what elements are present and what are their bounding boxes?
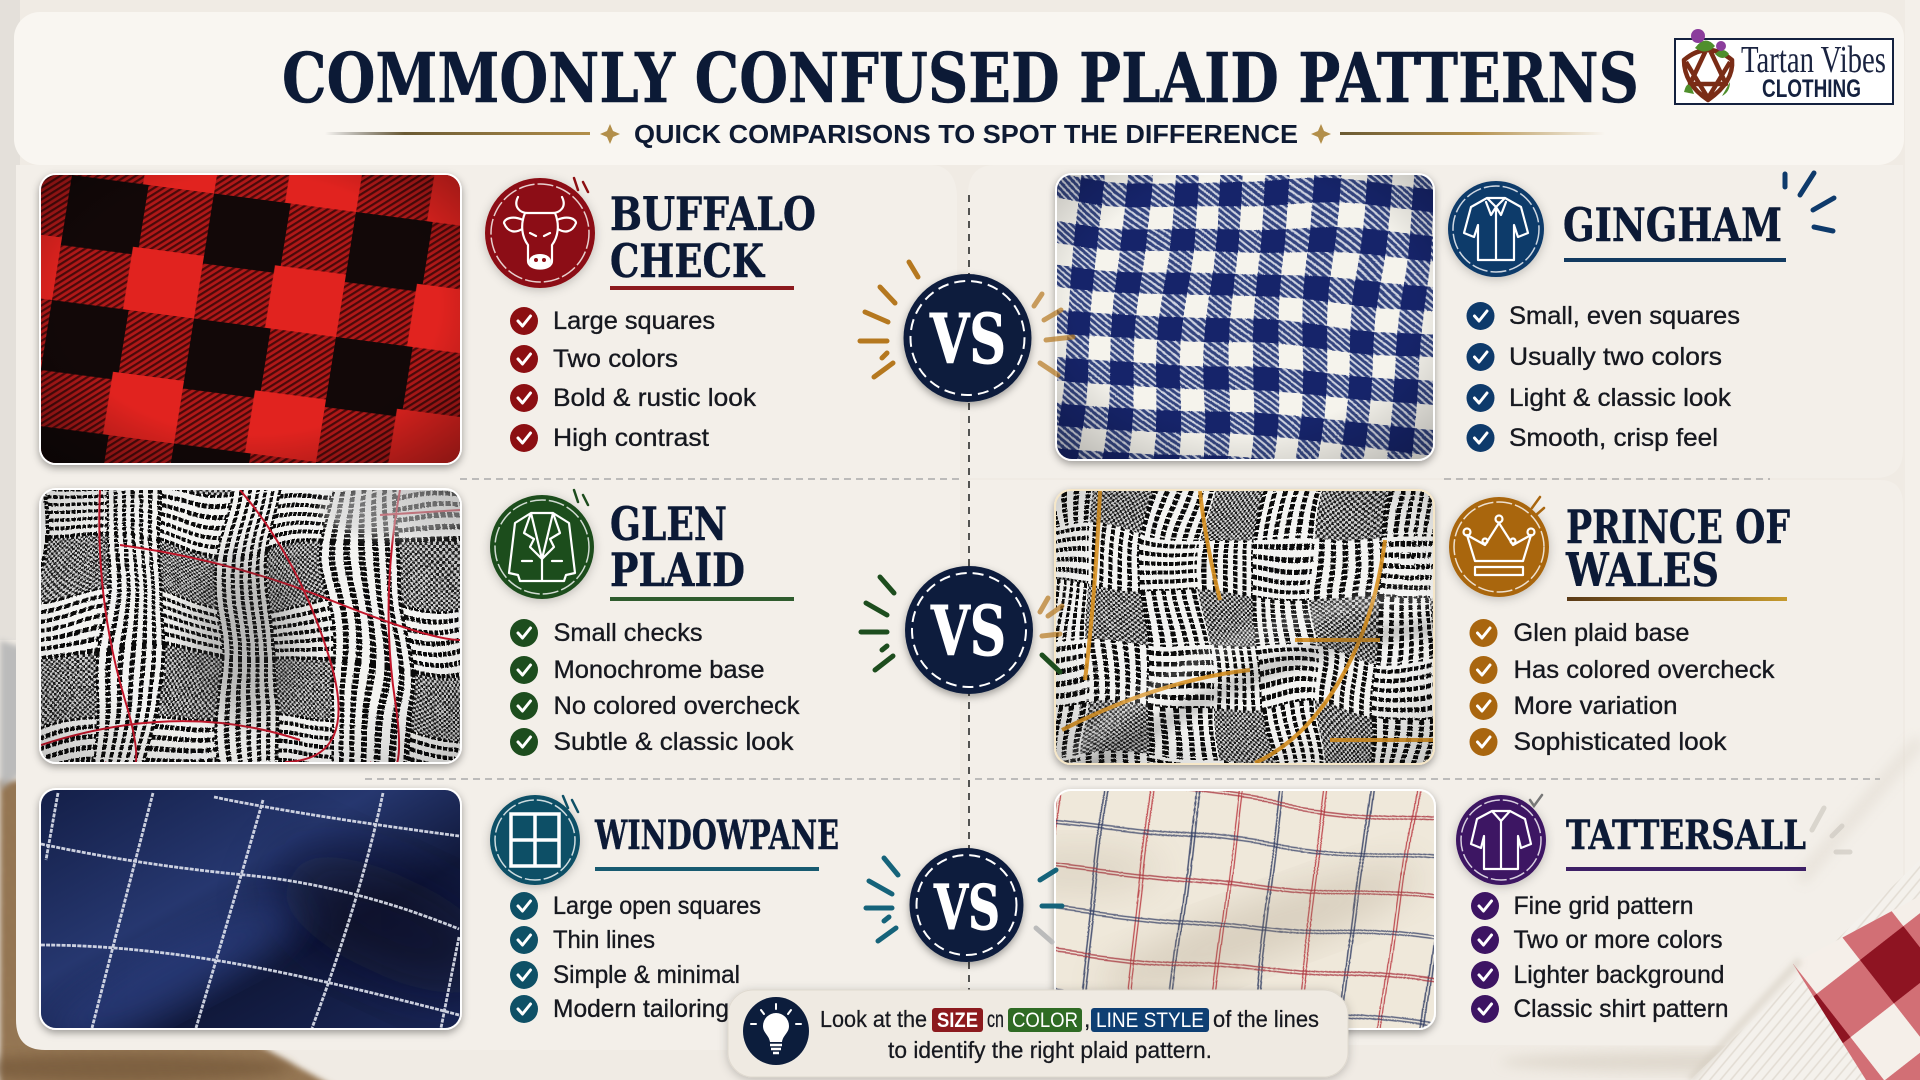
icon: lightbulb	[743, 997, 809, 1065]
tip text: COLOR	[1012, 1009, 1078, 1032]
tip text: Look at the	[820, 1006, 927, 1032]
list: gingham traits: Smooth, crisp feel	[1509, 424, 1718, 452]
row: glen plaid	[34, 486, 800, 772]
fabric swatch: windowpane	[34, 786, 467, 1038]
fabric swatch: buffalo check	[39, 173, 462, 465]
VS badge: glen plaid vs prince of wales	[861, 566, 1062, 694]
sparkle marks	[1530, 795, 1542, 806]
sparkle marks	[563, 796, 578, 812]
list: prince of wales traits	[1470, 619, 1775, 756]
list: gingham traits: Small, even squares	[1509, 302, 1740, 330]
list: buffalo check traits: Large squares	[553, 307, 715, 335]
sparkle marks	[1532, 497, 1544, 515]
title: COMMONLY CONFUSED PLAID PATTERNS	[282, 39, 1639, 119]
dashed dividers	[365, 195, 1880, 990]
list: windowpane traits: Simple & minimal	[553, 961, 740, 989]
panel: title header	[14, 12, 1904, 165]
row: buffalo check	[39, 173, 816, 465]
heading: glen plaid: GLEN	[610, 497, 727, 551]
list: tattersall traits: Fine grid pattern	[1514, 892, 1694, 920]
sparkle marks	[1785, 173, 1834, 231]
list: glen plaid traits: Monochrome base	[554, 656, 764, 684]
list: buffalo check traits: Two colors	[553, 345, 678, 373]
tip text: to identify the right plaid pattern.	[888, 1037, 1212, 1063]
heading: prince of wales: PRINCE OF	[1566, 500, 1790, 554]
icon: window on teal badge	[490, 795, 580, 885]
list: glen plaid traits: No colored overcheck	[554, 692, 800, 720]
list: windowpane traits: Thin lines	[553, 926, 655, 954]
subtitle with ornamented rules	[325, 119, 1605, 149]
list: gingham traits	[1466, 302, 1740, 452]
subtitle with ornamented rules: QUICK COMPARISONS TO SPOT THE DIFFERENCE	[634, 119, 1298, 149]
panel: right comparison rows two and three	[968, 480, 1903, 1045]
heading: tattersall	[1566, 812, 1806, 871]
list: tattersall traits: Classic shirt pattern	[1514, 995, 1728, 1023]
heading: windowpane	[594, 812, 839, 871]
list: tattersall traits: Two or more colors	[1514, 926, 1722, 954]
logo: Tartan Vibes Clothing: CLOTHING	[1762, 75, 1861, 103]
heading: windowpane: WINDOWPANE	[594, 812, 839, 859]
row: gingham	[1010, 130, 1834, 505]
sparkle marks	[574, 178, 588, 192]
tip text	[820, 1006, 1319, 1063]
fabric swatch: tattersall	[1049, 787, 1441, 1038]
list: prince of wales traits: Sophisticated look	[1514, 728, 1727, 756]
tip text: ,	[1084, 1006, 1090, 1032]
icon: shirt on purple badge	[1456, 795, 1546, 885]
VS badge: glen plaid vs prince of wales: VS	[930, 592, 1006, 672]
list: tattersall traits	[1471, 892, 1728, 1023]
decorative cloth: white knit with red check in the lower right corner	[1690, 740, 1920, 1080]
row: tattersall	[1000, 745, 1850, 1075]
fabric swatch: gingham	[1050, 171, 1440, 469]
list: tattersall traits: Lighter background	[1514, 961, 1724, 989]
fabric swatch: prince of wales	[1049, 487, 1440, 773]
heading: buffalo check: BUFFALO	[610, 187, 816, 241]
faint sparkle marks	[1812, 808, 1850, 852]
heading: buffalo check: CHECK	[610, 234, 766, 288]
VS badge: buffalo check vs gingham	[860, 262, 1073, 402]
VS badge: buffalo check vs gingham: VS	[929, 300, 1006, 380]
list: windowpane traits: Large open squares	[553, 892, 761, 920]
panel: right comparison row one	[968, 165, 1903, 478]
list: windowpane traits	[510, 892, 761, 1023]
heading: prince of wales: WALES	[1565, 543, 1719, 597]
list: windowpane traits: Modern tailoring	[553, 995, 729, 1023]
list: gingham traits: Light & classic look	[1509, 384, 1732, 412]
list: prince of wales traits: Glen plaid base	[1514, 619, 1690, 647]
heading: glen plaid	[610, 497, 794, 601]
heading: gingham: GINGHAM	[1563, 198, 1782, 252]
row: windowpane	[32, 788, 839, 1067]
list: buffalo check traits	[510, 307, 757, 452]
callout: tip for identifying plaid	[728, 990, 1348, 1077]
heading: prince of wales	[1565, 500, 1790, 601]
sparkle marks	[574, 490, 588, 505]
heading: glen plaid: PLAID	[610, 543, 745, 597]
list: glen plaid traits: Subtle & classic look	[554, 728, 794, 756]
tip text: cn	[987, 1006, 1004, 1032]
logo: Tartan Vibes Clothing	[1675, 29, 1893, 104]
heading: buffalo check	[610, 187, 816, 290]
tip text: SIZE	[937, 1009, 978, 1032]
list: gingham traits: Usually two colors	[1509, 343, 1722, 371]
VS badge: windowpane vs tattersall	[866, 848, 1062, 962]
icon: crown on gold badge	[1449, 497, 1549, 597]
tip text: LINE STYLE	[1096, 1009, 1204, 1032]
tip text: of the lines	[1213, 1006, 1319, 1032]
icon: blazer on green badge	[490, 495, 594, 599]
list: buffalo check traits: Bold & rustic look	[553, 384, 757, 412]
icon: shirt on navy badge	[1448, 181, 1544, 277]
row: prince of wales	[1005, 440, 1790, 810]
list: prince of wales traits: More variation	[1514, 692, 1678, 720]
VS badge: windowpane vs tattersall: VS	[933, 871, 1000, 944]
list: prince of wales traits: Has colored overcheck	[1514, 656, 1775, 684]
fabric swatch: glen plaid	[34, 486, 467, 772]
list: buffalo check traits: High contrast	[553, 424, 709, 452]
list: glen plaid traits: Small checks	[554, 619, 702, 647]
panel: left comparison column	[16, 165, 960, 1050]
heading: tattersall: TATTERSALL	[1566, 812, 1806, 859]
list: glen plaid traits	[510, 619, 800, 756]
icon: buffalo head	[485, 178, 595, 288]
